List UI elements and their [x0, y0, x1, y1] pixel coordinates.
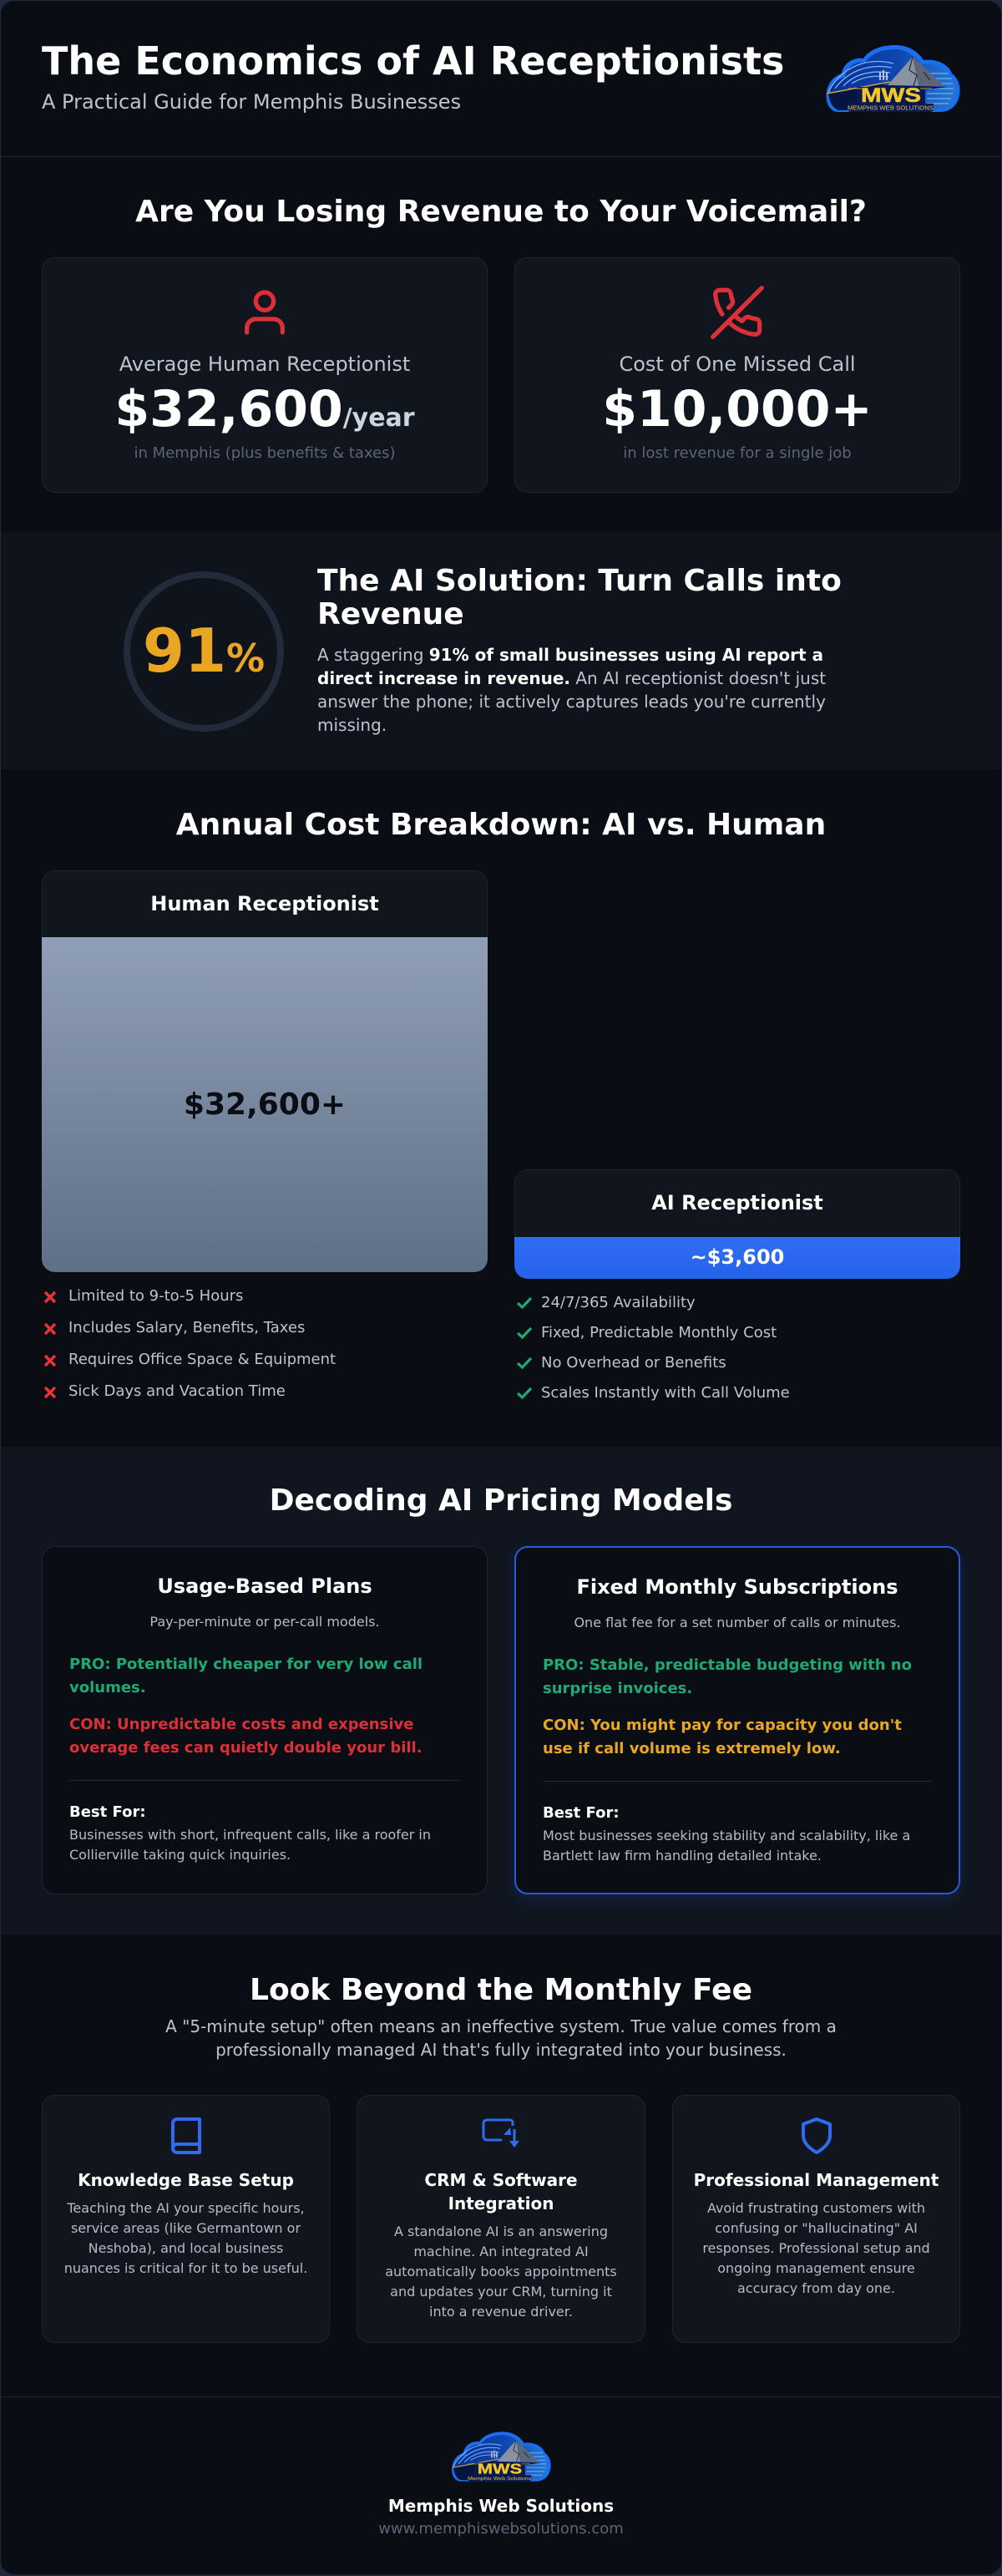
intro paragraph: professionally managed AI that's fully integrated into your business. [215, 2040, 787, 2060]
card text [64, 2200, 307, 2276]
paragraph: answer the phone; it actively captures leads you're currently [317, 692, 826, 712]
card title: Knowledge Base Setup [78, 2170, 294, 2190]
bar label: AI Receptionist [651, 1191, 823, 1214]
heading: Decoding AI Pricing Models [270, 1483, 732, 1518]
title: The Economics of AI Receptionists [42, 38, 784, 84]
card text: Teaching the AI your specific hours, [67, 2200, 305, 2216]
logo: Memphis Web Solutions [452, 2431, 551, 2482]
con [543, 1716, 902, 1757]
card title: CRM & Software [424, 2170, 578, 2190]
card text [702, 2200, 930, 2296]
card text: machine. An integrated AI [413, 2244, 589, 2259]
card: missed call cost [514, 257, 960, 493]
label: Cost of One Missed Call [619, 352, 856, 376]
card: human receptionist cost [42, 257, 488, 493]
logo: Memphis Web Solutions: MWS [478, 2461, 522, 2477]
card: fixed monthly subscriptions [514, 1546, 960, 1894]
card text: confusing or "hallucinating" AI [715, 2220, 918, 2236]
paragraph [317, 645, 826, 735]
card title: Fixed Monthly Subscriptions [576, 1575, 898, 1599]
icons: green checks [517, 1296, 533, 1400]
bar: human cost [42, 937, 488, 1272]
card title: Professional Management [694, 2170, 939, 2190]
pro [543, 1656, 912, 1697]
icon: shield [802, 2117, 832, 2154]
item: Limited to 9-to-5 Hours [68, 1287, 243, 1305]
icons: red crosses [43, 1291, 57, 1398]
intro paragraph [165, 2016, 837, 2060]
company name: Memphis Web Solutions [388, 2496, 614, 2516]
heading: Look Beyond the Monthly Fee [250, 1973, 752, 2007]
label: Average Human Receptionist [119, 352, 410, 376]
stat ring: 91%: 91% [143, 616, 265, 686]
bar value: ~$3,600 [691, 1245, 784, 1269]
subtitle: A Practical Guide for Memphis Businesses [42, 90, 461, 114]
pro: PRO: Stable, predictable budgeting with no [543, 1656, 912, 1674]
card text: accuracy from day one. [737, 2280, 895, 2296]
con [69, 1716, 423, 1757]
bar chart column: AI receptionist [514, 1169, 960, 1279]
card text: into a revenue driver. [429, 2304, 573, 2320]
item: No Overhead or Benefits [541, 1354, 726, 1372]
note: in Memphis (plus benefits & taxes) [134, 444, 396, 462]
best for text: Businesses with short, infrequent calls, like a roofer in [69, 1827, 431, 1843]
card title: Integration [448, 2193, 554, 2213]
heading: Are You Losing Revenue to Your Voicemail? [135, 195, 867, 229]
best for text [543, 1828, 910, 1864]
logo: Memphis Web Solutions [827, 45, 960, 112]
card text: A standalone AI is an answering [394, 2224, 608, 2239]
header [0, 0, 1002, 157]
card: usage-based plans [42, 1546, 488, 1894]
card title: Usage-Based Plans [157, 1575, 372, 1598]
value: $10,000+ [602, 380, 873, 439]
paragraph: direct increase in revenue. An AI receptionist doesn't just [317, 668, 826, 688]
card description: One flat fee for a set number of calls or minutes. [574, 1615, 901, 1630]
bar chart column: human receptionist [42, 870, 488, 1272]
bar header [514, 1169, 960, 1237]
con: CON: You might pay for capacity you don't [543, 1716, 902, 1734]
con: CON: Unpredictable costs and expensive [69, 1716, 413, 1733]
card text: Neshoba), and local business [89, 2240, 283, 2256]
card text: Avoid frustrating customers with [707, 2200, 925, 2216]
list: human drawbacks [43, 1287, 336, 1400]
heading: The AI Solution: Turn Calls into [317, 564, 842, 598]
best for [543, 1781, 932, 1874]
item: Fixed, Predictable Monthly Cost [541, 1324, 777, 1341]
card: knowledge base [42, 2095, 330, 2343]
item: 24/7/365 Availability [541, 1294, 696, 1311]
card text: ongoing management ensure [717, 2260, 915, 2276]
list: AI benefits [517, 1294, 790, 1402]
card text [385, 2224, 617, 2320]
logo: Memphis Web Solutions: Memphis Web Solutions [468, 2477, 532, 2482]
card text: and updates your CRM, turning it [390, 2284, 612, 2300]
item: Requires Office Space & Equipment [68, 1351, 336, 1368]
section: beyond the monthly fee [42, 1973, 960, 2343]
paragraph: A staggering 91% of small businesses using AI report a [317, 645, 823, 665]
best for text: Bartlett law firm handling detailed intake. [543, 1848, 822, 1864]
paragraph: missing. [317, 715, 387, 735]
heading: Revenue [317, 597, 464, 631]
footer [0, 2396, 1002, 2576]
logo: Memphis Web Solutions: MEMPHIS WEB SOLUTIONS [848, 105, 934, 112]
card text: responses. Professional setup and [702, 2240, 930, 2256]
website: www.memphiswebsolutions.com [378, 2520, 624, 2538]
card description: Pay-per-minute or per-call models. [149, 1614, 380, 1630]
pro: surprise invoices. [543, 1680, 692, 1697]
note: in lost revenue for a single job [623, 444, 852, 462]
item: Scales Instantly with Call Volume [541, 1384, 790, 1402]
pro [69, 1656, 423, 1696]
con: overage fees can quietly double your bill. [69, 1739, 423, 1757]
bar header [42, 870, 488, 937]
best for [69, 1780, 460, 1873]
value: $32,600/year [114, 380, 415, 439]
card text: automatically books appointments [385, 2264, 617, 2279]
best for text: Collierville taking quick inquiries. [69, 1847, 291, 1863]
heading: Annual Cost Breakdown: AI vs. Human [176, 808, 826, 842]
pro: PRO: Potentially cheaper for very low call [69, 1656, 423, 1673]
stat ring: 91% [124, 571, 284, 732]
item: Sick Days and Vacation Time [68, 1382, 286, 1400]
logo: Memphis Web Solutions: MWS [861, 84, 921, 107]
section: voicemail revenue loss [42, 195, 960, 493]
section: annual cost breakdown [42, 808, 960, 1402]
card text: service areas (like Germantown or [71, 2220, 301, 2236]
card text: nuances is critical for it to be useful. [64, 2260, 307, 2276]
bar value: $32,600+ [184, 1088, 346, 1122]
pro: volumes. [69, 1679, 146, 1696]
card: professional management [672, 2095, 960, 2343]
con: use if call volume is extremely low. [543, 1740, 841, 1757]
heading [317, 564, 842, 631]
best for label: Best For: [543, 1804, 620, 1822]
section: AI solution stat band [0, 532, 1002, 769]
intro paragraph: A "5-minute setup" often means an ineffective system. True value comes from a [165, 2016, 837, 2036]
bar: AI cost [514, 1237, 960, 1279]
card: CRM integration [357, 2095, 645, 2343]
icon: person [245, 290, 285, 335]
item: Includes Salary, Benefits, Taxes [68, 1319, 305, 1336]
card title [424, 2170, 578, 2213]
best for label: Best For: [69, 1803, 146, 1821]
bar label: Human Receptionist [150, 892, 379, 915]
best for text: Most businesses seeking stability and scalability, like a [543, 1828, 910, 1843]
section: pricing models [0, 1447, 1002, 1935]
icon: book [171, 2117, 201, 2154]
icon: screen with arrow [483, 2118, 519, 2148]
best for text [69, 1827, 431, 1863]
icon: phone off [711, 286, 764, 339]
